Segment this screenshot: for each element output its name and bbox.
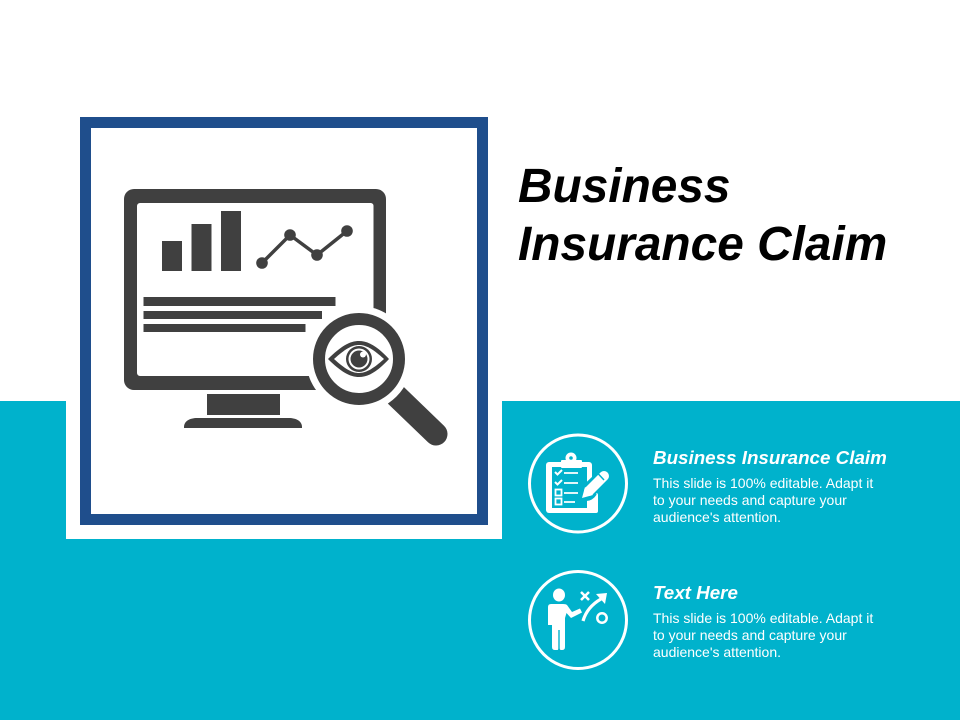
white frame panel (66, 103, 502, 539)
body text: audience's attention. (653, 509, 781, 525)
teal background band (0, 401, 960, 720)
body text (653, 610, 874, 660)
line chart (256, 225, 353, 269)
monitor stand (184, 394, 302, 428)
title: Insurance Claim (518, 218, 887, 271)
monitor screen frame (124, 189, 386, 390)
presenter (548, 588, 582, 650)
title: Business (518, 160, 731, 213)
blue square frame (80, 117, 488, 525)
circle mark (597, 613, 607, 623)
body text: This slide is 100% editable. Adapt it (653, 610, 873, 626)
bar chart (162, 211, 241, 271)
eye (328, 341, 389, 377)
heading: Business Insurance Claim (653, 447, 887, 468)
body text: audience's attention. (653, 644, 781, 660)
text block: business insurance claim (653, 447, 887, 525)
text block: text here (653, 582, 874, 660)
icon: presenter with strategy play in circle (528, 570, 628, 670)
body text (653, 475, 874, 525)
icon: clipboard and pencil in circle (528, 434, 628, 534)
cross mark (581, 592, 589, 600)
body text: This slide is 100% editable. Adapt it (653, 475, 873, 491)
body text: to your needs and capture your (653, 627, 847, 643)
clipboard (546, 452, 598, 513)
heading: Text Here (653, 582, 738, 603)
pencil (582, 472, 604, 498)
play arrow (583, 593, 607, 621)
title (518, 160, 887, 271)
magnifying glass (306, 306, 436, 434)
report text lines (144, 297, 336, 332)
body text: to your needs and capture your (653, 492, 847, 508)
